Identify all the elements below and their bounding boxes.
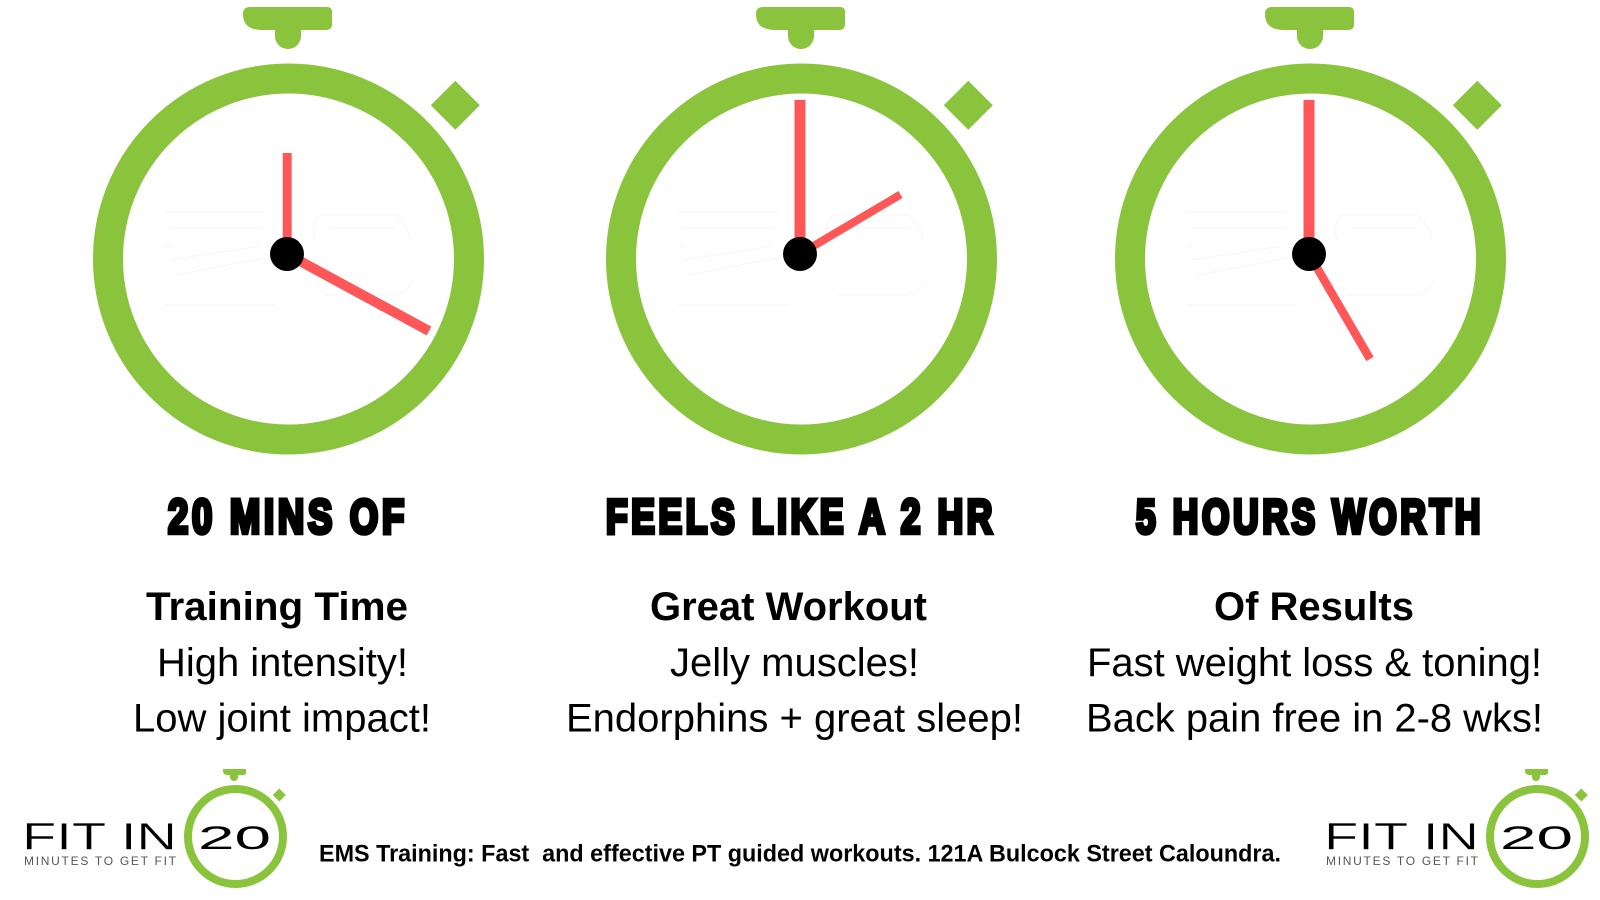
subheading: Training Time: [146, 585, 408, 629]
logo wordmark: FIT IN: [22, 816, 177, 858]
hour hand: [1309, 254, 1370, 359]
logo crown: [223, 769, 246, 781]
stopwatch crown: [1265, 7, 1354, 49]
logo ring: [1490, 789, 1585, 884]
stopwatch side button: [944, 81, 993, 130]
logo side button: [273, 788, 286, 802]
clock hub: [1292, 237, 1326, 271]
heading: 5 hours worth: 5 HOURS WORTH: [1136, 491, 1484, 544]
logo number: 20: [1500, 820, 1573, 856]
stopwatch crown: [756, 7, 845, 49]
logo crown: [1525, 769, 1548, 781]
minute hand: [1304, 100, 1314, 254]
heading: 20 mins of: 20 MINS OF: [168, 491, 408, 544]
logo number: 20: [198, 820, 271, 856]
stopwatch ring: [108, 78, 469, 440]
stopwatch side button: [1453, 81, 1502, 130]
stopwatch: 20 minutes: [108, 7, 480, 440]
stopwatch side button: [431, 81, 480, 130]
clock hub: [783, 237, 817, 271]
hour hand: [287, 254, 429, 331]
heading: feels like a 2 hr: FEELS LIKE A 2 HR: [606, 491, 996, 544]
subheading: Of Results: [1214, 585, 1414, 629]
benefit line: High intensity!: [157, 641, 408, 685]
stopwatch: 5 hours: [1130, 7, 1502, 440]
benefit line: Jelly muscles!: [670, 641, 919, 685]
benefit line: Low joint impact!: [133, 696, 431, 740]
benefit line: Fast weight loss & toning!: [1087, 641, 1542, 685]
clock hub: [270, 237, 304, 271]
stopwatch crown: [243, 7, 332, 49]
text block: of results: [1086, 585, 1543, 740]
logo side button: [1575, 788, 1588, 802]
stopwatch ring: [621, 78, 982, 440]
logo wordmark: FIT IN: [1324, 816, 1479, 858]
minute hand: [283, 153, 292, 254]
text block: training time: [133, 585, 431, 740]
logo tagline: MINUTES TO GET FIT: [24, 854, 177, 868]
stopwatch ring: [1130, 78, 1491, 440]
minute hand: [794, 100, 806, 254]
logo ring: [188, 789, 283, 884]
logo: left: [22, 769, 286, 884]
hour hand: [800, 194, 900, 254]
text block: great workout: [566, 585, 1023, 740]
benefit line: Endorphins + great sleep!: [566, 696, 1023, 740]
footer text: EMS Training: Fast and effective PT guided workouts. 121A Bulcock Street Caloundra.: [319, 840, 1281, 868]
benefit line: Back pain free in 2-8 wks!: [1086, 696, 1543, 740]
stopwatch: 2 hours: [621, 7, 993, 440]
logo tagline: MINUTES TO GET FIT: [1326, 854, 1479, 868]
subheading: Great Workout: [650, 585, 927, 629]
logo: right: [1324, 769, 1588, 884]
